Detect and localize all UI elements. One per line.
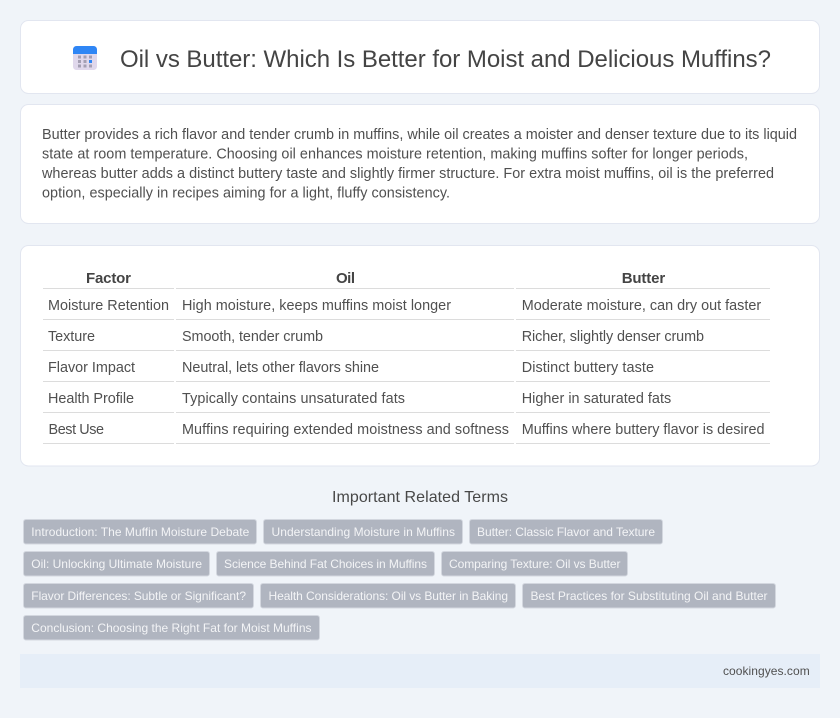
tag [24,552,210,576]
intro paragraph [41,127,797,201]
row: texture: Richer, slightly denser crumb [522,329,704,345]
row: flavor impact: Neutral, lets other flavors shine [182,360,379,376]
table header [86,270,665,287]
tag: Introduction: The Muffin Moisture Debate [31,525,250,539]
tag [24,584,254,608]
heading: related terms: Important Related Terms [332,489,508,506]
table header: Butter [622,270,665,287]
tag: Flavor Differences: Subtle or Significant? [31,589,246,603]
tag [24,616,320,640]
tag [442,552,628,576]
intro paragraph: state at room temperature. Choosing oil enhances moisture retention, making muffins softer for longer periods, [42,146,748,162]
footer source: cookingyes.com [723,664,810,678]
intro paragraph: whereas butter adds a distinct buttery taste and slightly firmer structure. For extra moist muffins, oil is the preferred [41,166,774,182]
row: flavor impact [48,360,654,376]
row: moisture retention: High moisture, keeps muffins moist longer [182,298,451,314]
tag [470,520,662,544]
header panel [20,20,820,94]
tag [24,520,256,544]
row: moisture retention [48,298,761,314]
tag: Comparing Texture: Oil vs Butter [449,557,620,571]
tag: Butter: Classic Flavor and Texture [477,525,655,539]
related term tags [24,520,776,640]
intro paragraph: option, especially in recipes aiming for a light, fluffy consistency. [42,185,450,201]
row: health profile: Health Profile [48,391,134,407]
tag: Oil: Unlocking Ultimate Moisture [31,557,202,571]
tag: Conclusion: Choosing the Right Fat for Moist Muffins [31,621,312,635]
row: health profile: Higher in saturated fats [522,391,671,407]
panel: comparison table [20,246,820,466]
row: best use: Best Use [48,422,104,438]
row: health profile [48,391,671,407]
tag [216,552,434,576]
table header: Oil [336,270,355,287]
tag [264,520,462,544]
row: texture: Texture [48,329,95,345]
row: moisture retention: Moisture Retention [48,298,169,314]
title: Oil vs Butter: Which Is Better for Moist and Delicious Muffins? [120,46,771,73]
table header: Factor [86,270,131,287]
row: best use: Muffins where buttery flavor is desired [522,422,764,438]
tag: Science Behind Fat Choices in Muffins [224,557,427,571]
footer bar [20,654,820,688]
row: best use: Muffins requiring extended moistness and softness [182,422,509,438]
row: texture [48,329,704,345]
row: flavor impact: Distinct buttery taste [522,360,654,376]
intro paragraph: Butter provides a rich flavor and tender crumb in muffins, while oil creates a moister and denser texture due to its liquid [42,127,797,143]
tag: Best Practices for Substituting Oil and Butter [530,589,768,603]
row: flavor impact: Flavor Impact [48,360,135,376]
tag [522,584,776,608]
row: health profile: Typically contains unsaturated fats [182,391,405,407]
row: texture: Smooth, tender crumb [182,329,323,345]
tag: Health Considerations: Oil vs Butter in Baking [268,589,508,603]
row: moisture retention: Moderate moisture, can dry out faster [522,298,761,314]
panel: introduction [20,104,820,224]
icon: calendar [73,46,97,70]
tag: Understanding Moisture in Muffins [272,525,455,539]
row: best use [48,422,764,438]
tag [260,584,516,608]
